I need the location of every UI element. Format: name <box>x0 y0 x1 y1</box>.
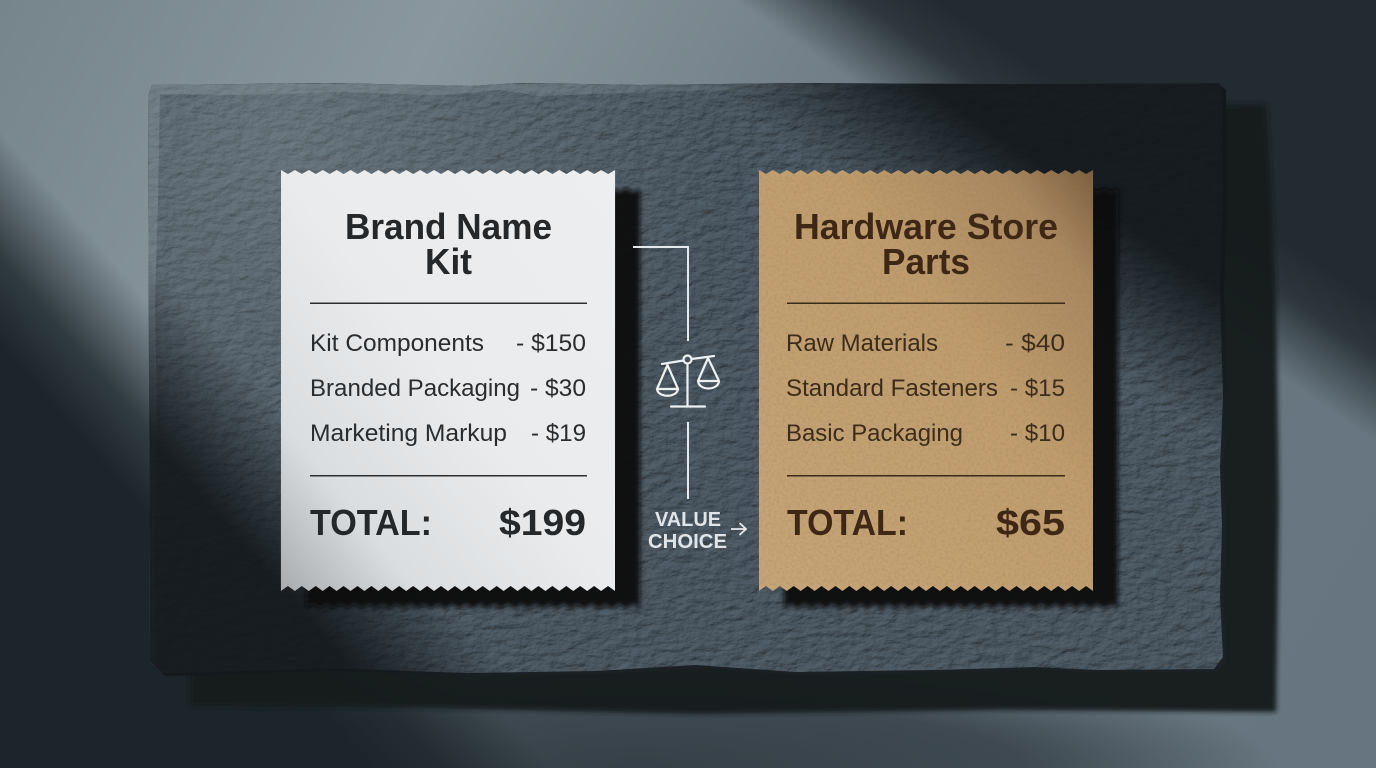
heading: hardware store parts: Hardware Store <box>794 206 1058 247</box>
heading: hardware store parts: Parts <box>882 241 970 282</box>
panel: brand name receipt <box>281 170 640 609</box>
connector line below scale <box>687 422 689 499</box>
heading: brand name kit <box>345 206 552 282</box>
total: hardware store: TOTAL: <box>787 502 908 543</box>
panel: slate board <box>142 77 1232 679</box>
line items: - $19 <box>531 420 586 447</box>
receipt shadow <box>306 188 640 609</box>
receipt paper <box>281 170 615 591</box>
total: brand name: TOTAL: <box>310 502 432 543</box>
paper grain <box>759 175 1093 586</box>
icon: balance scale <box>657 356 719 406</box>
line items: Raw Materials <box>786 330 938 357</box>
line items: - $30 <box>530 375 586 402</box>
receipt paper <box>759 170 1093 591</box>
line items: Marketing Markup <box>310 420 507 447</box>
heading: brand name kit: Kit <box>425 241 472 282</box>
line items: - $15 <box>1010 375 1065 402</box>
total: brand name: $199 <box>499 502 586 543</box>
slate cast shadow <box>190 104 1279 714</box>
panel: hardware store receipt <box>759 170 1118 609</box>
total: brand name <box>310 502 586 543</box>
line items: Basic Packaging <box>786 420 963 447</box>
line items: Kit Components <box>310 330 484 357</box>
receipt shadow <box>784 188 1118 609</box>
line items: - $40 <box>1005 330 1065 357</box>
total: hardware store: $65 <box>996 502 1065 543</box>
total: hardware store <box>787 502 1065 543</box>
heading: hardware store parts <box>794 206 1058 282</box>
line items: Branded Packaging <box>310 375 520 402</box>
line items <box>310 330 586 447</box>
line items <box>786 330 1065 447</box>
label: value choice <box>648 508 727 553</box>
line items: Standard Fasteners <box>786 375 998 402</box>
line items: - $10 <box>1010 420 1065 447</box>
label: value choice: VALUE <box>655 508 721 531</box>
connector arrow: top elbow line <box>633 247 688 341</box>
arrow: value choice to hardware store <box>731 523 746 535</box>
line items: - $150 <box>516 330 586 357</box>
heading: brand name kit: Brand Name <box>345 206 552 247</box>
label: value choice: CHOICE <box>648 530 727 553</box>
